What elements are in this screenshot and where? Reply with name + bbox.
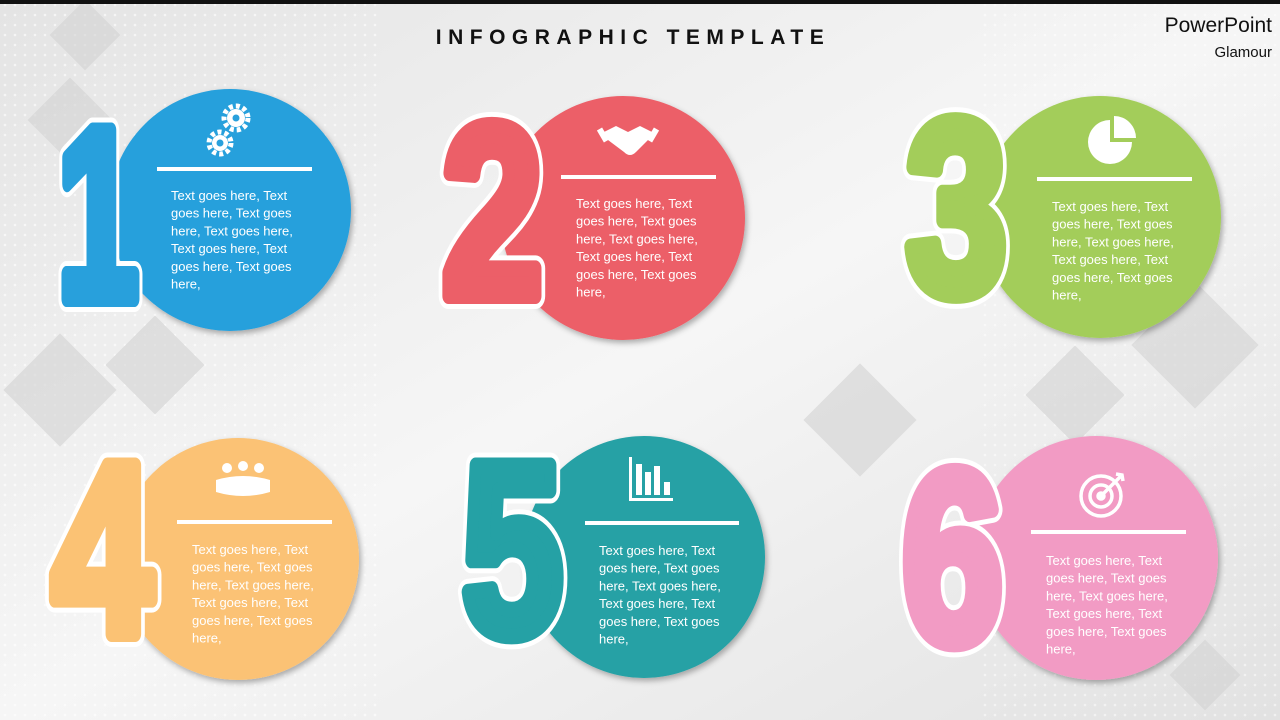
number 5: 5: [462, 412, 563, 686]
number 4: 4: [52, 412, 153, 686]
brand: Glamour: [1214, 44, 1272, 61]
text block 3: Text goes here, Text: [1052, 199, 1168, 214]
text block 2: goes here, Text goes: [576, 267, 697, 282]
icon: handshake: [597, 126, 659, 155]
number 3: 3: [906, 69, 1007, 345]
text block 3: here, Text goes here,: [1052, 234, 1174, 249]
text block 1: here,: [171, 276, 201, 292]
number 6: 6: [902, 420, 1003, 694]
text block 4: goes here, Text goes: [192, 560, 313, 575]
text block 6: here, Text goes here,: [1046, 588, 1168, 603]
text block 3: goes here, Text goes: [1052, 217, 1173, 232]
text block 6: Text goes here, Text: [1046, 606, 1162, 621]
text block 4: Text goes here, Text: [192, 542, 308, 557]
panel: item 3: [906, 69, 1221, 345]
text block 5: goes here, Text goes: [599, 561, 720, 576]
text block 2: Text goes here, Text: [576, 196, 692, 211]
icon: bar chart: [629, 457, 673, 501]
number 2: 2: [442, 74, 543, 348]
text block 4: here, Text goes here,: [192, 577, 314, 592]
icon: pie chart: [1088, 116, 1136, 164]
panel: item 5: [462, 412, 765, 686]
text block 1: Text goes here, Text: [171, 188, 287, 203]
text block 5: here,: [599, 632, 629, 646]
panel: item 4: [52, 412, 359, 686]
text block 5: Text goes here, Text: [599, 543, 715, 558]
text block 3: goes here, Text goes: [1052, 270, 1173, 285]
text block 2: Text goes here, Text: [576, 249, 692, 264]
brand: PowerPoint: [1165, 14, 1272, 37]
text block 6: Text goes here, Text: [1046, 553, 1162, 568]
text block 4: goes here, Text goes: [192, 613, 313, 628]
title: INFOGRAPHIC TEMPLATE: [436, 26, 830, 49]
panel: item 1: [57, 77, 351, 351]
text block 5: Text goes here, Text: [599, 596, 715, 611]
text block 6: goes here, Text goes: [1046, 571, 1167, 586]
text block 5: here, Text goes here,: [599, 578, 721, 593]
text block 1: goes here, Text goes: [171, 206, 292, 221]
text block 3: Text goes here, Text: [1052, 252, 1168, 267]
icon: meeting: [216, 461, 270, 496]
text block 2: goes here, Text goes: [576, 214, 697, 229]
number 1: 1: [57, 77, 139, 351]
text block 1: goes here, Text goes: [171, 259, 292, 274]
icon: target: [1081, 474, 1123, 516]
text block 6: here,: [1046, 642, 1076, 656]
panel: item 6: [902, 420, 1218, 694]
number 5: 5: [462, 412, 563, 686]
number 3: 3: [906, 69, 1007, 345]
text block 2: here,: [576, 284, 606, 300]
text block 4: here,: [192, 630, 222, 646]
text block 4: Text goes here, Text: [192, 595, 308, 610]
icon: gears: [209, 106, 248, 154]
text block 6: goes here, Text goes: [1046, 624, 1167, 639]
number 4: 4: [52, 412, 153, 686]
text block 5: goes here, Text goes: [599, 614, 720, 629]
text block 1: Text goes here, Text: [171, 241, 287, 256]
brand: [1165, 14, 1272, 61]
text block 2: here, Text goes here,: [576, 231, 698, 246]
number 2: 2: [442, 74, 543, 348]
panel: item 2: [442, 74, 745, 348]
number 6: 6: [902, 420, 1003, 694]
number 1: 1: [57, 77, 139, 351]
text block 1: here, Text goes here,: [171, 223, 293, 238]
text block 3: here,: [1052, 288, 1082, 302]
